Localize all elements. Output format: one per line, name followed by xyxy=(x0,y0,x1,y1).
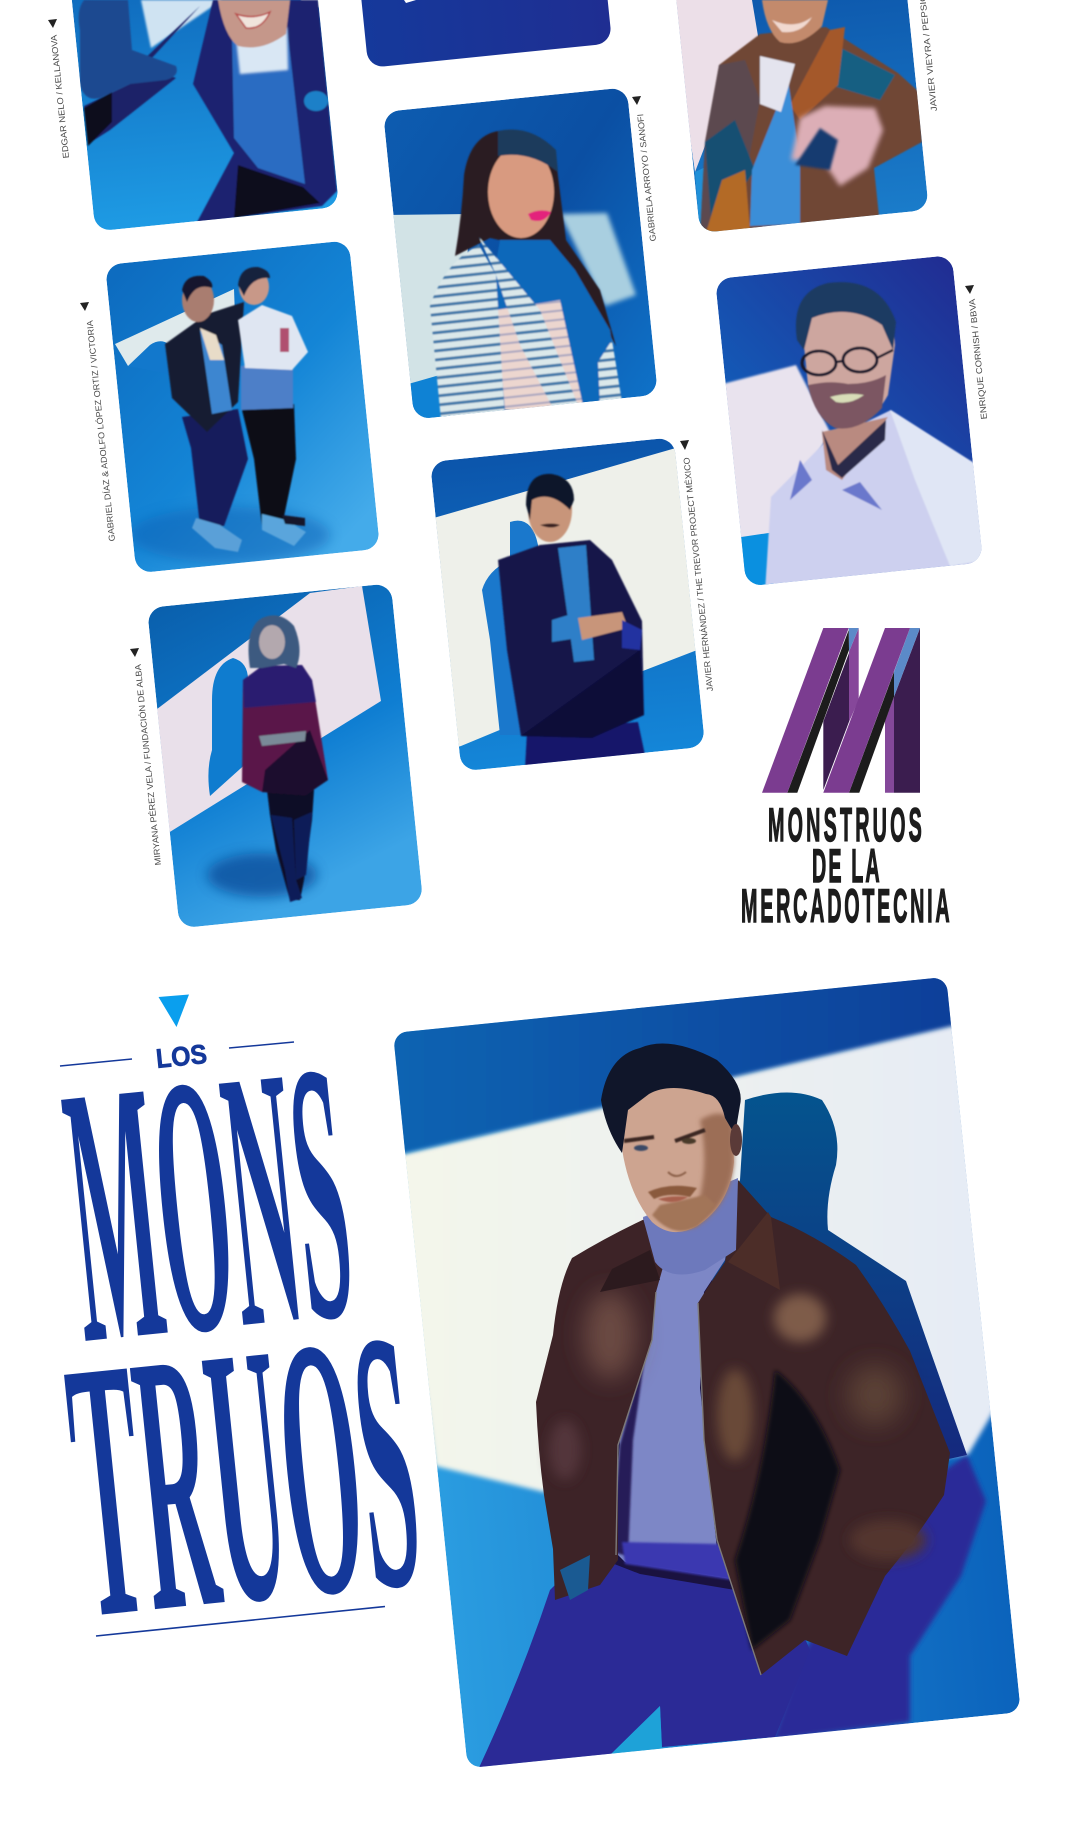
title: Los Monstruos xyxy=(51,987,434,1696)
figure: Javier Hernández xyxy=(498,474,645,768)
heading: MONS: MONS xyxy=(51,987,367,1422)
sweater xyxy=(612,1180,738,1579)
hand xyxy=(560,1555,590,1600)
logo wordmark: MERCADOTECNIA xyxy=(741,879,952,932)
logo wordmark: MONSTRUOS xyxy=(768,798,925,851)
panel: portrait Miryana Pérez Vela xyxy=(140,583,423,928)
caption: Javier Hernández: JAVIER HERNÁNDEZ / THE TREVOR PROJECT MÉXICO xyxy=(681,457,715,692)
heading: TRUOS: TRUOS xyxy=(54,1254,434,1696)
light patch on wall xyxy=(395,1022,1000,1492)
trousers xyxy=(479,1564,810,1767)
jacket left xyxy=(536,1217,665,1600)
rule left of LOS xyxy=(60,1059,132,1066)
dark top band xyxy=(394,978,952,1157)
jacket right xyxy=(698,1180,950,1675)
head shadow xyxy=(712,1092,967,1459)
caption: Javier Vieyra: JAVIER VIEYRA / PEPSICO xyxy=(916,0,939,112)
panel: portrait Edgar Nelo xyxy=(65,0,339,231)
figure: Gabriel xyxy=(165,276,248,552)
torso underlay xyxy=(615,1280,732,1590)
turtleneck xyxy=(643,1178,738,1274)
light blue wedge xyxy=(611,1706,662,1754)
hair xyxy=(601,1044,741,1153)
figure: Javier Vieyra xyxy=(700,0,922,236)
caption: Enrique Cornish: ENRIQUE CORNISH / BBVA xyxy=(967,298,989,420)
figure: Edgar xyxy=(79,0,337,224)
figure: Adolfo xyxy=(238,267,308,546)
face xyxy=(620,1085,734,1232)
panel: portrait Gabriel Díaz and Adolfo López Ortiz xyxy=(105,240,380,573)
logo: Monstruos de la Mercadotecnia xyxy=(741,628,952,932)
caption: Edgar Nelo: EDGAR NELO / KELLANOVA xyxy=(48,34,71,159)
panel: main portrait xyxy=(385,965,1021,1772)
purple wall shadow xyxy=(773,1455,986,1740)
caption: Miryana Pérez Vela: MIRYANA PÉREZ VELA / FUNDACIÓN DE ALBA xyxy=(133,664,163,866)
panel: blue colour card xyxy=(338,0,612,68)
rule right of LOS xyxy=(229,1042,294,1048)
panel: portrait Javier Vieyra xyxy=(670,0,929,236)
heading: LOS: LOS xyxy=(155,1040,208,1074)
rule under title xyxy=(96,1606,385,1636)
panel: portrait Enrique Cornish xyxy=(715,255,990,592)
logo wordmark xyxy=(741,798,952,932)
figure: Miryana xyxy=(242,615,328,902)
caption: Gabriel Díaz and Adolfo López Ortiz: GABRIEL DÍAZ & ADOLFO LÓPEZ ORTIZ / VICTORIA xyxy=(85,320,117,542)
icon: blue triangle xyxy=(158,994,189,1027)
caption: Gabriela Arroyo: GABRIELA ARROYO / SANOFI xyxy=(635,113,658,242)
figure: Gabriela xyxy=(430,130,622,420)
panel: portrait Javier Hernández xyxy=(420,437,718,771)
facial features xyxy=(624,1130,705,1202)
logo wordmark: DE LA xyxy=(812,839,882,892)
figure: Enrique xyxy=(765,282,990,592)
panel: portrait Gabriela Arroyo xyxy=(383,87,658,425)
logo mark xyxy=(762,628,920,793)
figure: man in leather jacket xyxy=(536,1044,950,1675)
